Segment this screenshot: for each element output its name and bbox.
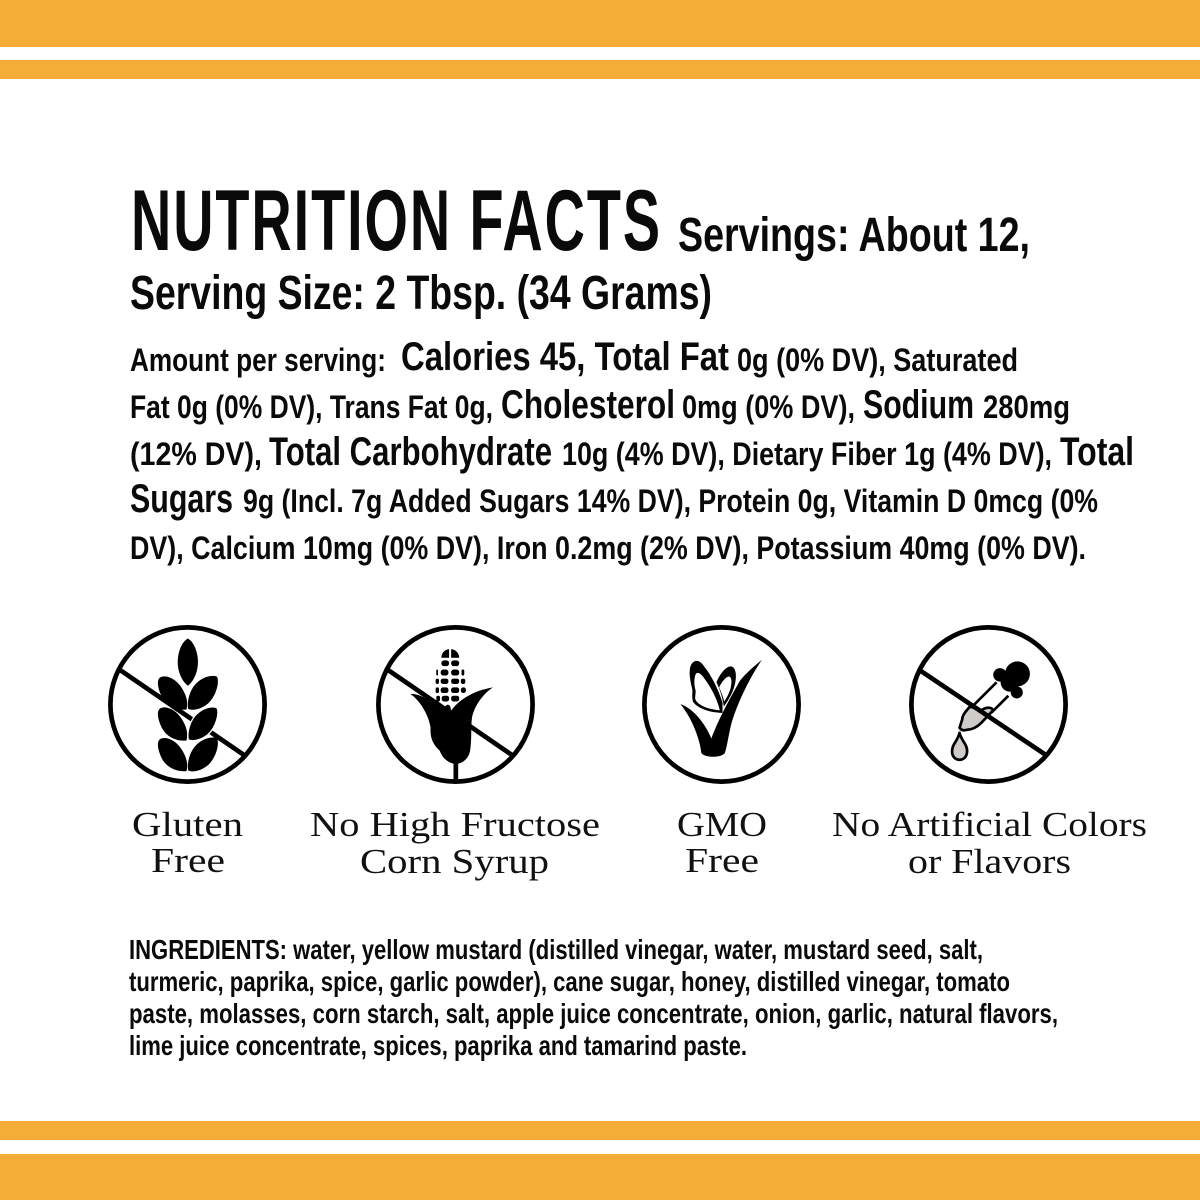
- line 2: [130, 383, 1070, 427]
- text block: ingredients: INGREDIENTS: water, yellow mustard (distilled vinegar, water, mustard seed, salt,: [129, 934, 983, 965]
- line 3: [130, 430, 1134, 474]
- line 3: 10g (4% DV), Dietary Fiber 1g (4% DV),: [562, 436, 1052, 472]
- line 2: 280mg: [983, 389, 1070, 425]
- line 3: Total Carbohydrate: [269, 430, 552, 474]
- label: gmo free: GMO: [677, 805, 767, 844]
- flower petals: [690, 661, 736, 713]
- bottom stripes: [0, 1121, 1200, 1200]
- top stripes: [0, 0, 1200, 79]
- label: no artificial colors or flavors: No Artificial Colors: [832, 805, 1147, 844]
- dropper: [952, 661, 1030, 760]
- label: no high fructose corn syrup: No High Fructose: [310, 805, 600, 844]
- heading: NUTRITION FACTS: [131, 173, 662, 269]
- icon: gmo free: [644, 627, 799, 782]
- line 3: (12% DV),: [130, 436, 262, 472]
- icon: no high fructose corn syrup: [378, 627, 533, 782]
- label: no high fructose corn syrup: Corn Syrup: [360, 842, 549, 881]
- label: no high fructose corn syrup: [310, 805, 600, 881]
- label: gmo free: [677, 805, 767, 880]
- text block: ingredients: [129, 934, 1058, 1061]
- label: gluten free: Free: [151, 841, 225, 880]
- line 2: Sodium: [863, 383, 974, 427]
- label: no artificial colors or flavors: or Flavors: [908, 842, 1071, 881]
- line 1: 0g (0% DV), Saturated: [737, 342, 1018, 378]
- line 2: Fat 0g (0% DV), Trans Fat 0g,: [130, 389, 493, 425]
- line 4: Sugars: [130, 477, 233, 521]
- title: nutrition facts and servings: [130, 173, 1030, 320]
- label: gluten free: [132, 805, 243, 880]
- plant leaves: [680, 660, 762, 757]
- line 1: [130, 335, 1018, 379]
- text block: ingredients: lime juice concentrate, spices, paprika and tamarind paste.: [129, 1030, 747, 1061]
- label: gmo free: Free: [685, 841, 759, 880]
- servings: Servings: About 12,: [678, 209, 1030, 262]
- icon: no artificial colors or flavors: [911, 627, 1066, 782]
- line 2: 0mg (0% DV),: [682, 389, 855, 425]
- label: no artificial colors or flavors: [832, 805, 1147, 881]
- text block: nutrition amounts: [130, 335, 1134, 566]
- line 3: Total: [1060, 430, 1134, 474]
- icon: gluten free: [110, 627, 265, 782]
- serving size: Serving Size: 2 Tbsp. (34 Grams): [130, 267, 712, 320]
- line 1: Amount per serving:: [130, 342, 386, 378]
- line 1: Calories 45, Total Fat: [401, 335, 729, 379]
- line 4: [130, 477, 1098, 521]
- label: gluten free: Gluten: [132, 805, 243, 844]
- line 2: Cholesterol: [501, 383, 675, 427]
